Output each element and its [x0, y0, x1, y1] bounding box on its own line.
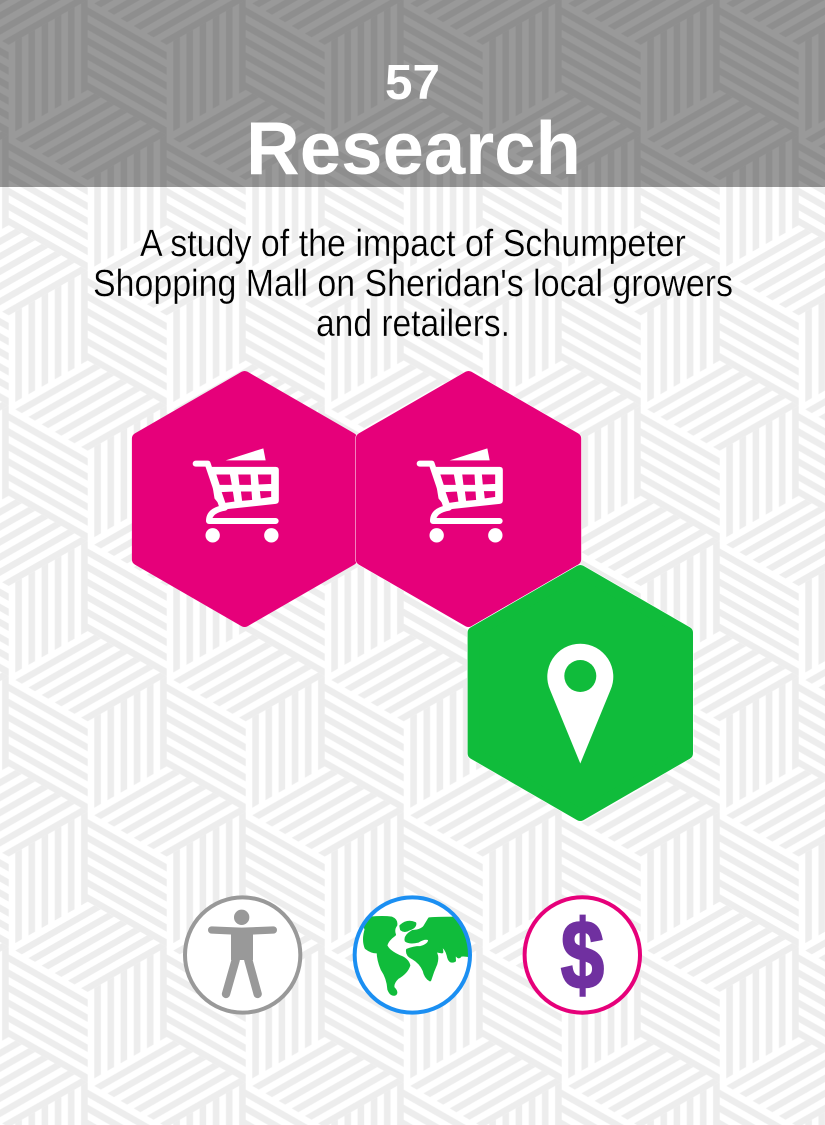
badge: person: [185, 897, 300, 1013]
description text: and retailers.: [316, 303, 510, 345]
description text: A study of the impact of Schumpeter: [140, 223, 686, 265]
badge: dollar: $: [561, 900, 604, 1009]
hexagon: pink cart right: [362, 377, 575, 621]
number: 57: [385, 56, 440, 110]
badge: globe: [355, 897, 470, 1013]
icon: shopping cart: [196, 448, 278, 542]
icon: map pin: [547, 644, 613, 764]
badge: dollar: [525, 897, 640, 1013]
description text: Shopping Mall on Sheridan's local growers: [93, 263, 733, 305]
icon: shopping cart: [420, 448, 502, 542]
description text: [93, 223, 733, 345]
hexagon: pink cart left: [138, 377, 351, 621]
header band: [0, 0, 825, 187]
hexagon: green location: [474, 571, 687, 815]
title: Research: [246, 106, 581, 190]
